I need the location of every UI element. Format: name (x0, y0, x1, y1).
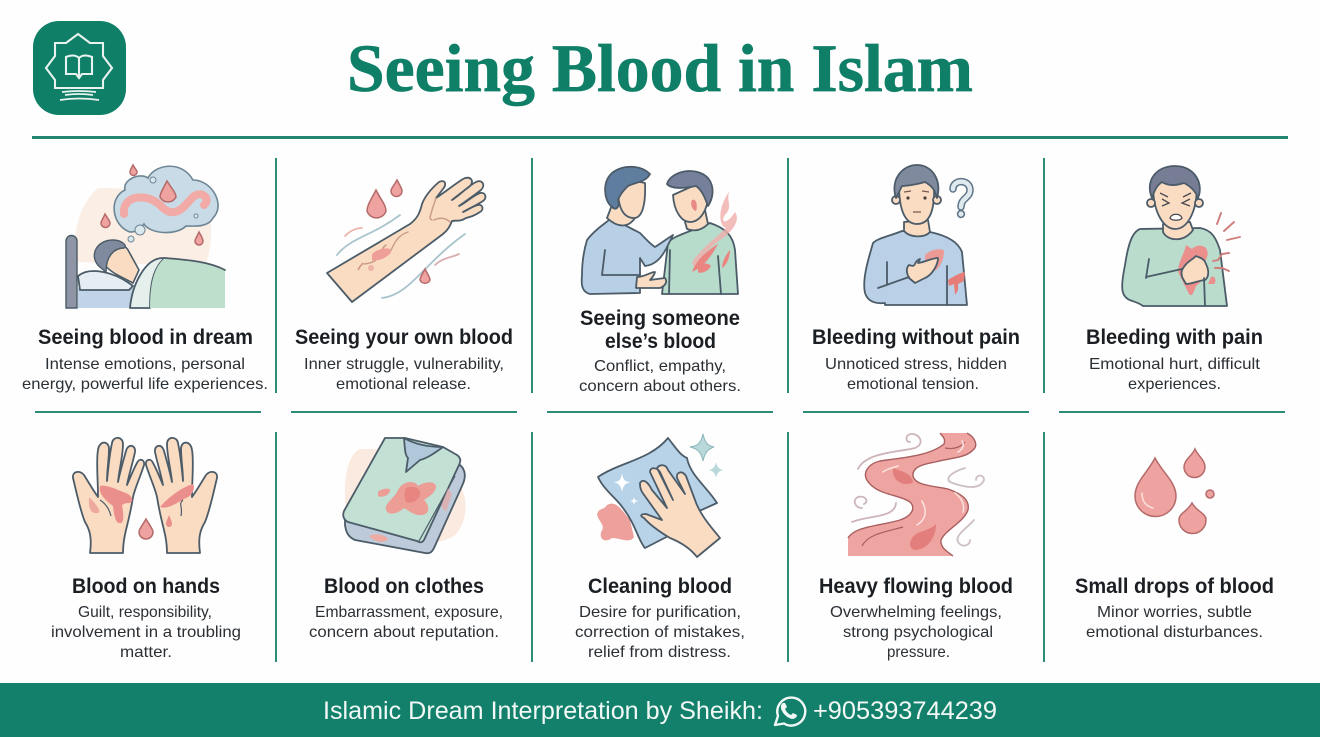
description (575, 604, 745, 661)
icon: flowing river of blood (848, 433, 984, 556)
description: Unnoticed stress, hidden (825, 356, 1007, 373)
heading: Small drops of blood (1075, 575, 1274, 598)
description (830, 604, 1002, 661)
description: involvement in a troubling (51, 624, 241, 641)
heading: Bleeding without pain (812, 326, 1020, 349)
description: emotional tension. (847, 376, 979, 393)
description: concern about others. (579, 378, 741, 395)
description: correction of mistakes, (575, 624, 745, 641)
heading: else’s blood (605, 330, 716, 353)
panel: small drops of blood (1075, 449, 1274, 641)
footer banner (0, 683, 1320, 737)
description: Embarrassment, exposure, (315, 604, 503, 621)
panel: bleeding with pain (1086, 166, 1263, 393)
heading: Seeing blood in dream (38, 326, 253, 349)
heading: Bleeding with pain (1086, 326, 1263, 349)
description: energy, powerful life experiences. (22, 376, 268, 393)
description: Minor worries, subtle (1097, 604, 1252, 621)
phone number: +905393744239 (813, 697, 997, 725)
description (579, 358, 741, 395)
panel: seeing someone else's blood (579, 167, 741, 395)
description (22, 356, 268, 393)
description: Desire for purification, (579, 604, 741, 621)
description: concern about reputation. (309, 624, 499, 641)
description: Intense emotions, personal (45, 356, 245, 373)
icon: whatsapp (775, 698, 805, 726)
heading: Seeing your own blood (295, 326, 513, 349)
panel: blood on clothes (309, 438, 503, 641)
panel: cleaning blood (575, 434, 745, 661)
description: emotional disturbances. (1086, 624, 1263, 641)
heading: Cleaning blood (588, 575, 732, 598)
description (51, 604, 241, 661)
description: strong psychological (843, 624, 993, 641)
description (1089, 356, 1261, 393)
title: Seeing Blood in Islam (347, 30, 973, 106)
description: Guilt, responsibility, (78, 604, 212, 621)
icon: sleeper dreaming of blood (66, 165, 225, 308)
panel: seeing blood in dream (22, 165, 268, 393)
logo: book in star badge (33, 21, 126, 115)
heading (580, 307, 740, 353)
icon: stained folded shirt (343, 438, 466, 553)
description: Conflict, empathy, (594, 358, 726, 375)
description: emotional release. (336, 376, 471, 393)
footer text: Islamic Dream Interpretation by Sheikh: (323, 697, 763, 725)
icon: hand wiping with cloth (597, 434, 723, 557)
description (309, 604, 503, 641)
description: pressure. (887, 644, 950, 661)
icon: blood stained hands (73, 438, 217, 553)
icon: blood drops (1135, 449, 1214, 534)
panel: bleeding without pain (812, 165, 1020, 393)
heading: Blood on hands (72, 575, 220, 598)
heading: Blood on clothes (324, 575, 484, 598)
heading: Seeing someone (580, 307, 740, 330)
description (304, 356, 504, 393)
description: experiences. (1128, 376, 1221, 393)
description: relief from distress. (588, 644, 731, 661)
description: Emotional hurt, difficult (1089, 356, 1261, 373)
panel: heavy flowing blood (819, 433, 1013, 661)
panel: blood on hands (51, 438, 241, 661)
panel: seeing your own blood (295, 178, 513, 393)
description: matter. (120, 644, 172, 661)
description (825, 356, 1007, 393)
description: Inner struggle, vulnerability, (304, 356, 504, 373)
description: Overwhelming feelings, (830, 604, 1002, 621)
icon: man with question mark (864, 165, 970, 305)
icon: bleeding arm (327, 178, 485, 302)
heading: Heavy flowing blood (819, 575, 1013, 598)
icon: man in pain holding chest (1122, 166, 1240, 306)
description (1086, 604, 1263, 641)
icon: man comforting bleeding man (582, 167, 738, 294)
